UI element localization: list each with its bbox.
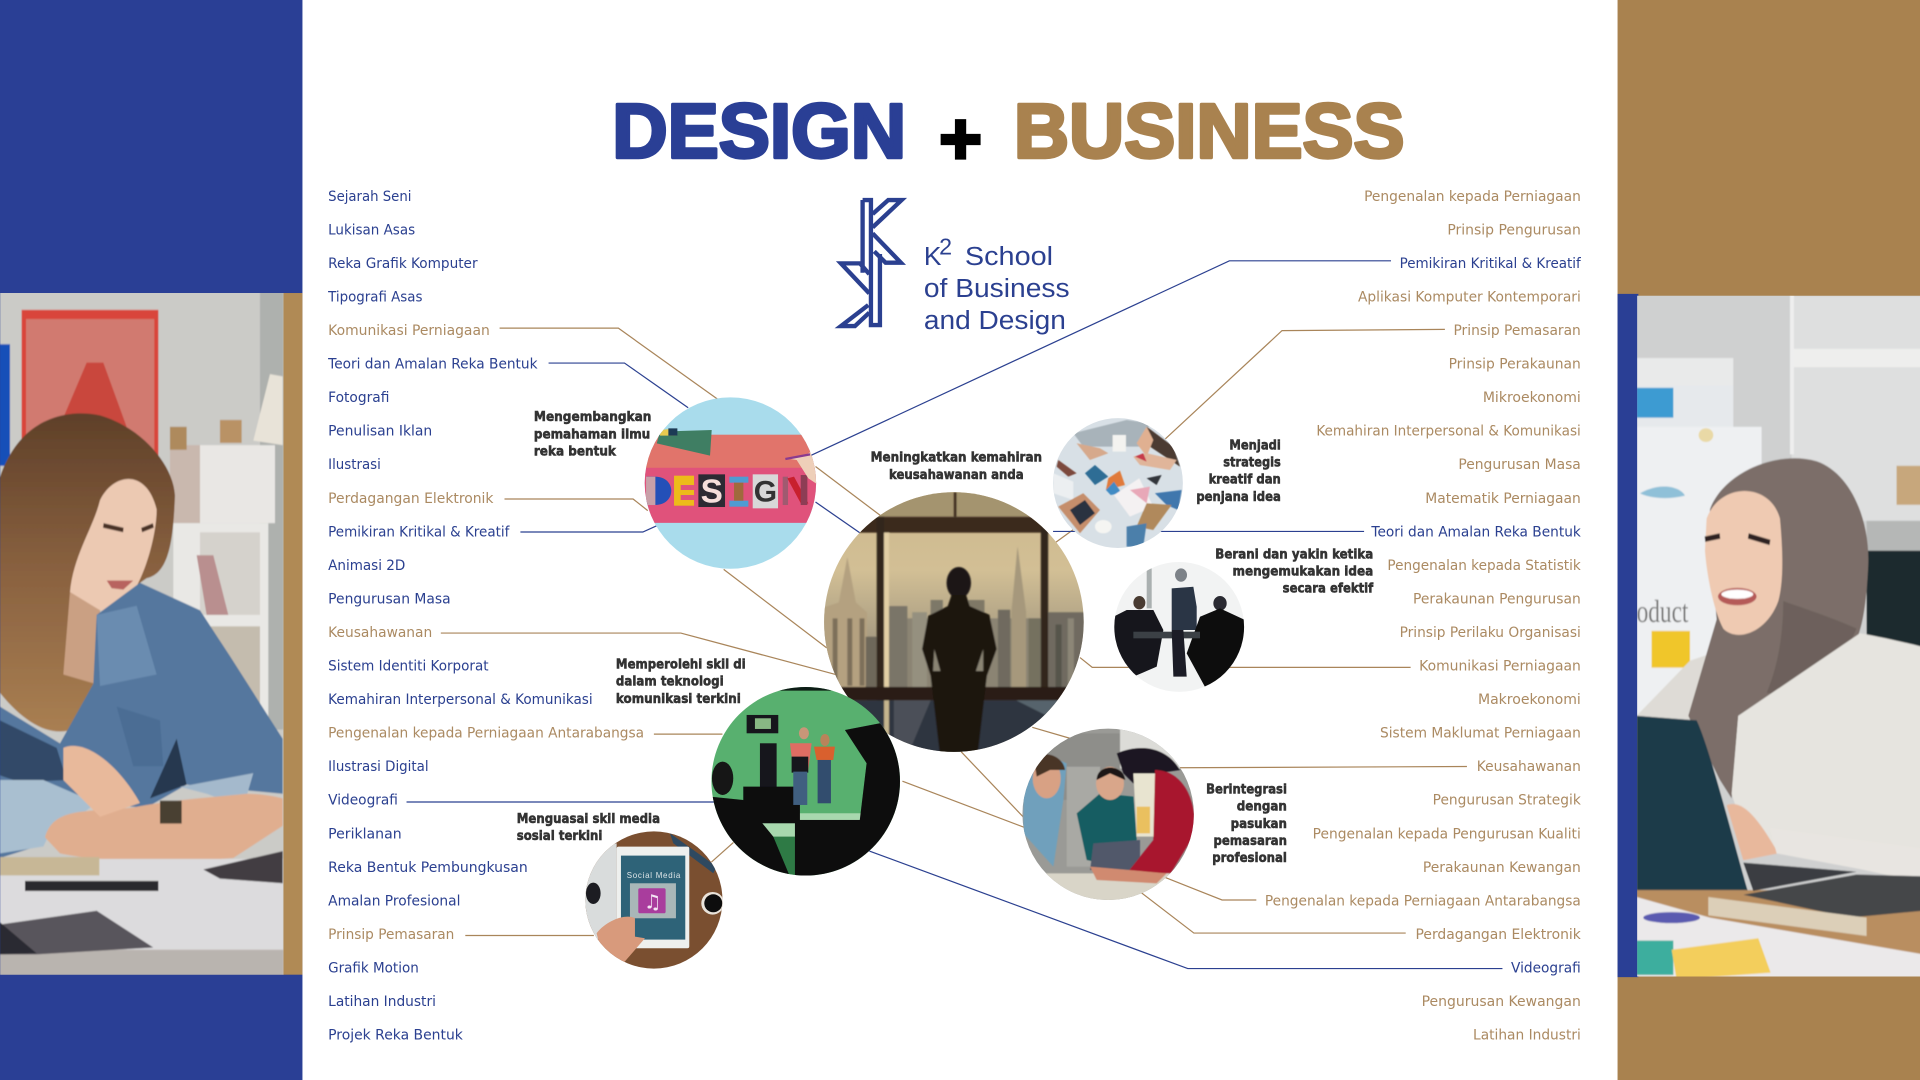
circle photo: team around desk from above — [1051, 416, 1185, 551]
left course list: design: Amalan Profesional — [328, 893, 460, 909]
right tan side panel — [1618, 0, 1920, 1080]
caption: develop design understanding: Mengembangkan — [534, 410, 651, 425]
caption: brave and confident: mengemukakan idea — [1232, 565, 1373, 580]
left course list: design: Fotografi — [328, 390, 389, 406]
left course list: design: Reka Grafik Komputer — [328, 256, 478, 272]
circle photo: colourful DESIGN letters: G — [754, 476, 777, 509]
left course list: design: Pemikiran Kritikal & Kreatif — [328, 524, 510, 540]
left course list: design: Kemahiran Interpersonal & Komunikasi — [328, 692, 593, 708]
logo wordmark: 2 — [939, 234, 952, 260]
right course list: business: Prinsip Perilaku Organisasi — [1400, 625, 1581, 641]
left course list: design: Sistem Identiti Korporat — [328, 659, 489, 675]
left course list: design: Ilustrasi — [328, 457, 381, 473]
caption: improve entrepreneurship skills: Meningkatkan kemahiran — [871, 451, 1042, 466]
left course list: design: Ilustrasi Digital — [328, 759, 429, 775]
left course list: design: Komunikasi Perniagaan — [328, 323, 490, 339]
caption: master social media skills — [517, 812, 660, 844]
right course list: business: Videografi — [1511, 960, 1581, 976]
caption: develop design understanding: pemahaman ilmu — [534, 427, 650, 442]
caption: improve entrepreneurship skills — [871, 451, 1042, 483]
left course list: design: Teori dan Amalan Reka Bentuk — [327, 357, 538, 373]
caption: creative strategist — [1196, 438, 1281, 505]
right course list: business: Makroekonomi — [1478, 692, 1581, 708]
caption: integrate with marketing team: pemasaran — [1213, 834, 1287, 849]
left course list: design: Grafik Motion — [328, 960, 419, 976]
left course list: design: Penulisan Iklan — [328, 424, 432, 440]
right course list: business: Kemahiran Interpersonal & Komunikasi — [1316, 424, 1581, 440]
caption: gain communication tech skills — [616, 658, 746, 707]
right course list: business: Keusahawanan — [1477, 759, 1581, 775]
logo wordmark: of Business — [924, 273, 1070, 303]
photo: smiling woman in hijab with laptop — [1633, 292, 1920, 980]
right course list: business: Mikroekonomi — [1483, 390, 1581, 406]
left course list: design: Latihan Industri — [328, 994, 436, 1010]
right course list: business: Pengenalan kepada Pengurusan Kualiti — [1313, 826, 1581, 842]
caption: integrate with marketing team: pasukan — [1231, 817, 1287, 832]
left course list: design: Lukisan Asas — [328, 222, 415, 238]
left course list: design: Sejarah Seni — [328, 189, 411, 205]
icon: music note: ♫ — [644, 891, 661, 914]
caption: develop design understanding — [534, 410, 651, 460]
left course list: design: Pengenalan kepada Perniagaan Antarabangsa — [328, 726, 644, 742]
caption: gain communication tech skills: Memperolehi skil di — [616, 658, 746, 673]
caption: brave and confident — [1215, 547, 1374, 597]
caption: creative strategist: strategis — [1223, 456, 1281, 471]
right course list: business: Matematik Perniagaan — [1425, 491, 1581, 507]
left course list: design: Animasi 2D — [328, 558, 405, 574]
left course list: design: Tipografi Asas — [327, 289, 422, 305]
right course list: business: Pengurusan Strategik — [1433, 793, 1582, 809]
caption: gain communication tech skills: dalam teknologi — [616, 675, 724, 690]
caption: master social media skills: Menguasai skil media — [517, 812, 660, 827]
right course list: business: Teori dan Amalan Reka Bentuk — [1370, 524, 1582, 540]
left tan accent strip — [283, 293, 302, 975]
caption: improve entrepreneurship skills: keusahawanan anda — [889, 468, 1024, 483]
caption: integrate with marketing team: profesional — [1212, 851, 1287, 866]
caption: integrate with marketing team — [1206, 782, 1287, 866]
circle photo: business meeting silhouettes — [1112, 560, 1247, 694]
title plus sign: + — [939, 97, 982, 180]
left course list: design: Periklanan — [328, 826, 402, 842]
right course list: business: Pengenalan kepada Perniagaan — [1364, 189, 1581, 205]
right course list: business: Prinsip Perakaunan — [1449, 357, 1581, 373]
right course list: business: Komunikasi Perniagaan — [1419, 659, 1581, 675]
logo wordmark: School — [965, 241, 1053, 271]
right course list: business: Pengurusan Kewangan — [1422, 994, 1581, 1010]
left course list: design: Prinsip Pemasaran — [328, 927, 454, 943]
left blue side panel — [0, 0, 302, 1080]
right course list: business: Perdagangan Elektronik — [1416, 927, 1582, 943]
circle photo: colourful DESIGN letters: S — [701, 473, 723, 510]
right course list: business: Perakaunan Kewangan — [1423, 860, 1581, 876]
connector lines: tan — [441, 328, 1467, 936]
caption: develop design understanding: reka bentuk — [534, 445, 616, 460]
caption: integrate with marketing team: Berintegrasi — [1206, 782, 1287, 797]
left course list: design — [327, 189, 644, 1044]
right course list: business: Pengenalan kepada Perniagaan Antarabangsa — [1265, 893, 1581, 909]
left course list: design: Pengurusan Masa — [328, 591, 451, 607]
right course list: business: Pengenalan kepada Statistik — [1387, 558, 1582, 574]
logo wordmark: K — [924, 241, 942, 271]
right course list: business: Pemikiran Kritikal & Kreatif — [1400, 256, 1582, 272]
caption: brave and confident: Berani dan yakin ketika — [1215, 547, 1373, 562]
right course list: business: Prinsip Pengurusan — [1447, 222, 1581, 238]
tablet on-screen text: Social Media — [627, 871, 681, 880]
right course list: business: Latihan Industri — [1473, 1028, 1581, 1044]
right course list: business: Pengurusan Masa — [1458, 457, 1581, 473]
caption: creative strategist: kreatif dan — [1209, 473, 1281, 488]
circle photo: green screen studio with camera — [709, 683, 910, 880]
circle photo: marketing team at work — [1020, 726, 1200, 903]
title word: BUSINESS: BUSINESS — [1014, 88, 1404, 174]
right course list: business: Aplikasi Komputer Kontemporari — [1358, 289, 1581, 305]
caption: master social media skills: sosial terkini — [517, 829, 602, 844]
left course list: design: Projek Reka Bentuk — [328, 1028, 464, 1044]
logo wordmark: and Design — [924, 305, 1066, 335]
connector lines: blue — [407, 261, 1502, 969]
caption: creative strategist: Menjadi — [1229, 438, 1281, 453]
icon: K2 monogram — [841, 200, 902, 326]
left course list: design: Perdagangan Elektronik — [328, 491, 494, 507]
title word: DESIGN: DESIGN — [612, 88, 906, 174]
caption: brave and confident: secara efektif — [1283, 582, 1374, 597]
circle photo: tablet showing social media — [583, 829, 725, 971]
photo: woman with denim jacket at desk — [0, 289, 287, 977]
logo wordmark — [924, 234, 1070, 335]
title: DESIGN + BUSINESS — [612, 88, 1404, 180]
photo: smiling woman in hijab with laptop: oduct — [1637, 594, 1689, 630]
caption: gain communication tech skills: komunikasi terkini — [616, 692, 741, 707]
logo: K2 School of Business and Design — [841, 200, 1070, 335]
left course list: design: Reka Bentuk Pembungkusan — [328, 860, 528, 876]
circle photo: colourful DESIGN letters — [644, 397, 818, 571]
right blue accent strip — [1618, 294, 1638, 977]
left course list: design: Keusahawanan — [328, 625, 432, 641]
right course list: business: Perakaunan Pengurusan — [1413, 591, 1581, 607]
right course list: business: Prinsip Pemasaran — [1453, 323, 1581, 339]
caption: creative strategist: penjana idea — [1196, 490, 1281, 505]
circle photo: businessman looking at city skyline — [820, 490, 1090, 759]
right course list: business — [1265, 189, 1582, 1044]
man silhouette — [947, 567, 971, 599]
left course list: design: Videografi — [328, 793, 398, 809]
right course list: business: Sistem Maklumat Perniagaan — [1380, 726, 1581, 742]
city buildings — [906, 618, 1029, 688]
caption: integrate with marketing team: dengan — [1237, 800, 1287, 815]
